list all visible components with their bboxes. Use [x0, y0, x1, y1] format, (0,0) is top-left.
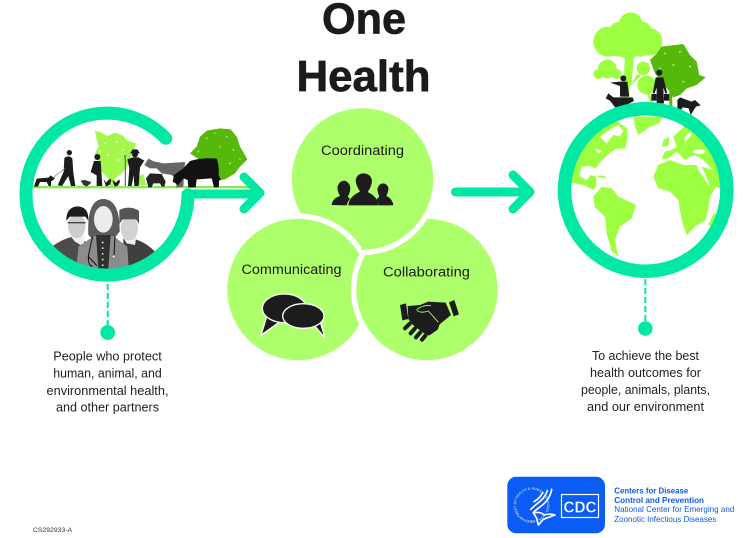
icon: group of people	[332, 173, 393, 205]
icon: black cow	[173, 158, 221, 187]
map: africa	[653, 160, 718, 235]
label: communicating: Communicating	[242, 262, 342, 277]
icon: farmer with staff	[125, 149, 144, 186]
title	[296, 0, 430, 101]
map: south america	[593, 187, 636, 257]
circle: collaborating	[356, 219, 498, 360]
ground line	[33, 186, 251, 188]
map: europe and asia	[662, 126, 718, 172]
icon: person with chickens	[81, 154, 120, 187]
text: outcomes: health outcomes for	[590, 366, 701, 380]
map: north america	[570, 119, 627, 190]
document code: CS292933-A	[33, 527, 73, 534]
map: greenland	[633, 117, 663, 135]
text: outcomes: people, animals, plants,	[581, 383, 710, 397]
dashed connector	[100, 284, 115, 340]
map: arabia	[702, 166, 720, 188]
text: outcomes: and our environment	[587, 400, 705, 414]
arrow: circles to outcomes	[456, 175, 530, 209]
panel: health outcomes	[564, 12, 730, 414]
icon: person with buckets	[651, 70, 669, 103]
circle overlap: coordinating over collaborating	[361, 200, 430, 256]
icon: small pig	[146, 173, 166, 187]
icon: dark green tree	[650, 44, 706, 107]
globe	[572, 116, 720, 258]
logo text: Control and Prevention	[614, 495, 704, 505]
circle: communicating	[227, 219, 369, 360]
icon: walker and dog	[34, 150, 75, 187]
icon: dark green tree	[190, 128, 247, 187]
map: britain	[662, 137, 669, 147]
icon: three health workers	[52, 199, 155, 273]
CDC box: CDC	[564, 500, 597, 516]
text: outcomes	[581, 349, 710, 414]
logo text: National Center for Emerging and	[614, 504, 735, 514]
text: people who protect: and other partners	[56, 401, 159, 415]
circle: coordinating	[292, 108, 433, 250]
icon: grey cow	[144, 159, 185, 187]
text: people who protect: human, animal, and	[53, 367, 162, 381]
logo text	[614, 485, 735, 524]
title: Health	[296, 52, 430, 101]
panel: people who protect health	[26, 113, 260, 415]
text: outcomes: To achieve the best	[592, 349, 699, 363]
icon: light green tree	[95, 131, 147, 186]
left worker	[53, 206, 88, 262]
logo badge	[507, 477, 605, 533]
icon: eagle	[531, 489, 555, 525]
right worker	[119, 208, 155, 266]
icon: light green trees	[593, 12, 662, 107]
scene: trees, people and animals on globe	[593, 12, 706, 115]
CDC box	[562, 494, 598, 518]
seal text ring: DEPARTMENT OF HEALTH & HUMAN SERVICES • USA • DEPARTMENT OF HEALTH	[514, 487, 550, 523]
icon: goat	[677, 97, 701, 115]
ring with arrow	[26, 113, 260, 275]
logo text: Centers for Disease	[614, 485, 689, 495]
map: madagascar	[708, 212, 716, 226]
label: coordinating: Coordinating	[321, 143, 404, 158]
text: people who protect: People who protect	[53, 350, 162, 364]
icon: speech bubbles	[261, 294, 325, 338]
dashed connector	[638, 279, 652, 336]
logo text: Zoonotic Infectious Diseases	[614, 514, 716, 524]
ring around globe	[564, 109, 727, 271]
label: collaborating: Collaborating	[383, 265, 470, 280]
text: people who protect	[46, 350, 168, 415]
panel: three overlapping circles	[227, 108, 498, 360]
centre worker	[76, 199, 129, 273]
scene: people, animals and trees	[33, 128, 251, 273]
icon: handshake	[400, 300, 459, 340]
text: people who protect: environmental health,	[46, 384, 168, 398]
icon: seated person and goat	[606, 75, 634, 107]
